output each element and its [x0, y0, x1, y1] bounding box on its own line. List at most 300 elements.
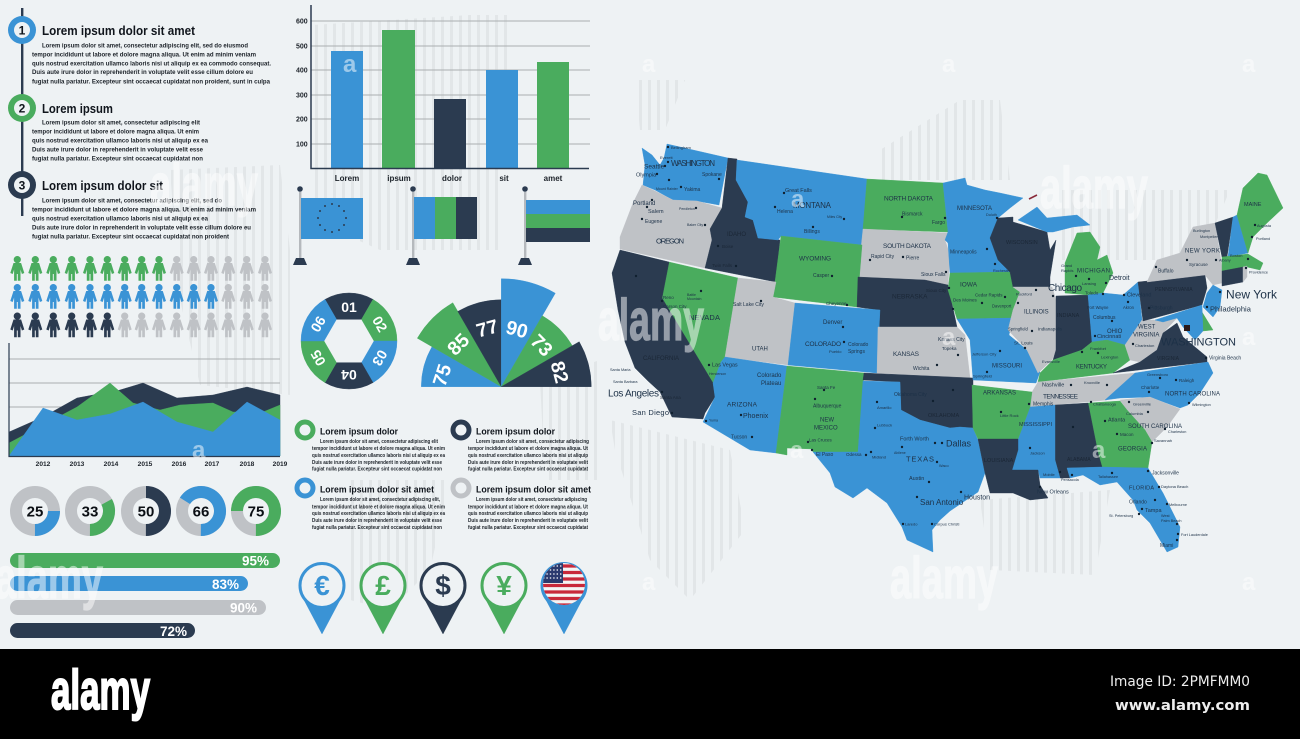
- map labels: Corpus Christi: [934, 522, 959, 526]
- map labels: Columbia: [1126, 411, 1144, 416]
- step 3 badge: 3: [19, 178, 26, 192]
- timeline: [8, 8, 36, 216]
- state: Iowa: [948, 272, 1020, 319]
- map labels: OREGON: [656, 236, 684, 246]
- map labels: Charleston: [1168, 430, 1186, 434]
- legend item blue: Lorem ipsum dolor sit amet: [320, 484, 434, 494]
- text block 3: fugiat nulla pariatur. Excepteur sint occaecat cupidatat non proident: [32, 234, 230, 240]
- map labels: Atlanta: [1108, 418, 1126, 424]
- map labels: Greenville: [1133, 402, 1152, 406]
- state: Alabama: [1055, 403, 1102, 478]
- legend item green: fugiat nulla pariatur. Excepteur sint occaecat cupidatat non: [312, 466, 442, 472]
- legend item gray: Lorem ipsum dolor sit amet: [476, 484, 591, 494]
- map labels: MONTANA: [793, 201, 832, 210]
- watermarks: a: [192, 437, 206, 464]
- map labels: Yakima: [684, 187, 701, 193]
- map labels: Lexington: [1101, 354, 1118, 360]
- map labels: Boise: [722, 244, 734, 249]
- map labels: Abilene: [894, 451, 906, 455]
- donut 66: [175, 485, 227, 537]
- text block 2: [32, 102, 208, 162]
- pin: yen: ¥: [496, 570, 512, 601]
- state: Mississippi: [1012, 405, 1060, 478]
- pin: dollar: [421, 564, 465, 634]
- bar chart: 200: [296, 116, 308, 124]
- map labels: Salt Lake City: [733, 302, 764, 308]
- pin: yen: [482, 564, 526, 634]
- bar chart: [296, 5, 590, 183]
- map labels: MINNESOTA: [957, 206, 992, 212]
- area chart: 2016: [172, 461, 187, 468]
- map labels: IOWA: [960, 282, 978, 288]
- map labels: St. Louis: [1014, 340, 1033, 346]
- state: Arkansas: [972, 385, 1032, 439]
- map labels: Miles City: [827, 215, 842, 219]
- state: Virginia: [1113, 323, 1207, 373]
- legend item green: [297, 422, 446, 472]
- map labels: Charleston: [1135, 343, 1154, 348]
- bar chart: 100: [296, 142, 308, 148]
- map labels: Great Falls: [785, 188, 812, 194]
- flag: horizontal tricolour: [518, 186, 590, 265]
- watermarks: alamy: [890, 546, 998, 611]
- map labels: Seattle: [644, 164, 665, 170]
- map labels: KANSAS: [893, 351, 920, 358]
- text block 2: fugiat nulla pariatur. Excepteur sint occaecat cupidatat non: [32, 156, 203, 162]
- map labels: Colorado: [757, 373, 782, 379]
- map labels: Rochester: [993, 269, 1011, 273]
- watermarks: [0, 51, 1256, 611]
- map labels: WASHINGTON: [671, 159, 715, 168]
- map labels: Tampa: [1145, 508, 1162, 514]
- map labels: St. Petersburg: [1109, 514, 1133, 518]
- text block 2: Lorem ipsum: [42, 102, 113, 116]
- map labels: Rockford: [1016, 292, 1032, 296]
- bar chart: ipsum: [387, 174, 411, 183]
- bar 95%: 95%: [242, 554, 269, 568]
- map labels: Duluth: [986, 213, 997, 217]
- state: Kentucky: [1038, 340, 1130, 382]
- map labels: Augusta: [1257, 224, 1272, 228]
- map labels: WEST: [1138, 324, 1156, 330]
- map labels: Syracuse: [1189, 262, 1208, 267]
- bar 90%: 90%: [230, 600, 257, 616]
- text block 1: quis nostrud exercitation ullamco laboris nisi ut aliquip ex ea commodo consequat.: [32, 60, 271, 68]
- map labels: Wichita: [913, 366, 930, 372]
- map labels: Springfield: [1008, 326, 1028, 332]
- map labels: Pendleton: [679, 207, 695, 211]
- area chart: 2018: [240, 461, 255, 468]
- map labels: Fargo: [932, 220, 945, 226]
- donut 33: [64, 485, 116, 537]
- state: Maryland: [1155, 305, 1203, 340]
- map labels: Mount Rainier: [656, 187, 679, 191]
- radial fan chart: 77: [474, 316, 501, 342]
- map labels: Indianapolis: [1038, 326, 1063, 332]
- hexagonal ring chart: 01: [341, 299, 357, 315]
- map labels: ARIZONA: [727, 402, 758, 408]
- map labels: San Antonio: [920, 498, 964, 507]
- map labels: Mountain: [687, 297, 701, 301]
- watermarks: a: [790, 437, 804, 464]
- state: Michigan lower: [1065, 232, 1113, 295]
- area chart: 2014: [104, 461, 119, 468]
- map labels: Lubbock: [877, 422, 892, 428]
- legend item blue: Duis aute irure dolor in reprehenderit in voluptate velit esse: [312, 518, 442, 524]
- legend item navy: tempor incididunt ut labore et dolore magna aliqua. Ut: [468, 446, 588, 452]
- map labels: Cleveland: [1127, 292, 1151, 298]
- map labels: Cincinnati: [1097, 334, 1121, 340]
- map labels: INDIANA: [1057, 313, 1080, 319]
- text block 3: Lorem ipsum dolor sit: [42, 179, 164, 193]
- map labels: COLORADO: [805, 341, 841, 348]
- map labels: MAINE: [1244, 202, 1262, 208]
- map labels: Davenport: [992, 304, 1012, 308]
- map labels: TEXAS: [906, 454, 934, 464]
- map labels: Tucson: [731, 434, 747, 440]
- state: Minnesota: [943, 178, 1023, 273]
- map labels: ILLINOIS: [1024, 310, 1049, 316]
- map labels: New Orleans: [1037, 490, 1069, 496]
- map labels: Miami: [1160, 543, 1173, 549]
- radial fan chart: 90: [503, 317, 530, 343]
- map labels: KENTUCKY: [1076, 364, 1107, 370]
- map labels: Amarillo: [877, 405, 892, 410]
- map labels: Phoenix: [743, 413, 769, 420]
- map labels: FLORIDA: [1129, 486, 1154, 492]
- donut 25: [16, 492, 54, 530]
- legend item blue: fugiat nulla pariatur. Excepteur sint occaecat cupidatat non: [312, 525, 442, 531]
- state: North Dakota: [863, 179, 948, 232]
- map labels: Toledo: [1085, 290, 1099, 296]
- bar chart: 400: [296, 68, 308, 74]
- map labels: Los Angeles: [608, 388, 659, 400]
- legend item navy: [453, 422, 589, 472]
- state: Oklahoma: [863, 373, 973, 428]
- map labels: Philadelphia: [1210, 304, 1252, 314]
- text block 2: quis nostrud exercitation ullamco laboris nisi ut aliquip ex ea: [32, 138, 208, 144]
- map labels: Bellingham: [671, 145, 691, 150]
- text block 2: Duis aute irure dolor in reprehenderit in voluptate velit esse: [32, 146, 203, 154]
- bar chart: Lorem: [335, 174, 359, 183]
- bar 83%: [10, 576, 248, 592]
- map labels: Albany: [1219, 258, 1231, 262]
- radial fan chart: [417, 279, 591, 389]
- state: Nebraska: [857, 277, 957, 327]
- legend item gray: tempor incididunt ut labore et dolore magna aliqua. Ut: [468, 504, 588, 510]
- bar chart: amet: [544, 174, 563, 183]
- map labels: Chicago: [1048, 283, 1082, 294]
- map labels: Henderson: [709, 372, 726, 376]
- text block 3: Lorem ipsum dolor sit amet, consectetur adipiscing elit, sed do: [42, 198, 222, 204]
- donut 50: [127, 492, 165, 530]
- watermarks: a: [642, 51, 656, 78]
- hexagonal ring chart: 04: [341, 367, 357, 383]
- pin: euro: [300, 564, 344, 634]
- state: Nevada: [662, 262, 738, 383]
- state: Delaware: [1202, 312, 1213, 331]
- watermarks: a: [1242, 324, 1256, 351]
- area chart: 2019: [273, 461, 288, 468]
- map labels: UTAH: [752, 346, 768, 352]
- map labels: Chattanooga: [1093, 402, 1117, 406]
- map labels: Las Cruces: [809, 438, 833, 442]
- text block 1: Lorem ipsum dolor sit amet, consectetur adipiscing elit, sed do eiusmod: [42, 42, 248, 50]
- step 1 badge: [8, 16, 36, 44]
- map labels: Olympia: [636, 172, 657, 178]
- map labels: TENNESSEE: [1043, 394, 1079, 400]
- legend item blue: [297, 480, 446, 531]
- map labels: Portland: [1256, 237, 1270, 241]
- legend item blue: tempor incididunt ut labore et dolore magna aliqua. Ut enim: [312, 504, 445, 510]
- donut 75: [237, 492, 275, 530]
- map labels: Pensacola: [1061, 478, 1080, 482]
- text block 3: quis nostrud exercitation ullamco laboris nisi ut aliquip ex ea: [32, 216, 208, 222]
- state: Montana: [736, 160, 867, 245]
- map labels: Yuma: [709, 418, 718, 422]
- map labels: MEXICO: [814, 426, 838, 432]
- state: Michigan upper: [1018, 207, 1090, 232]
- legend item blue: Lorem ipsum dolor sit amet, consectetur adipiscing elit,: [320, 497, 440, 503]
- watermarks: alamy: [150, 153, 258, 218]
- legend item navy: Duis aute irure dolor in reprehenderit in voluptate velit: [468, 460, 588, 466]
- state: Connecticut: [1222, 267, 1243, 286]
- map labels: Rapids: [1061, 268, 1073, 273]
- map labels: Topeka: [942, 346, 957, 351]
- map labels: OKLAHOMA: [928, 413, 960, 419]
- legend item navy: Lorem ipsum dolor: [476, 426, 555, 436]
- map labels: Forth Worth: [900, 436, 929, 442]
- area chart: [9, 343, 288, 468]
- legend item navy: quis nostrud exercitation ullamco laboris nisi ut aliquip: [468, 453, 588, 459]
- map labels: Twin Falls: [712, 263, 733, 268]
- radial fan chart: 75: [429, 361, 457, 389]
- text block 3: Duis aute irure dolor in reprehenderit in voluptate velit esse cillum dolore eu: [32, 224, 251, 232]
- state: Washington: [642, 144, 728, 205]
- state: Arizona: [703, 357, 787, 453]
- text block 3: [32, 179, 256, 240]
- map labels: West: [1161, 514, 1171, 518]
- map labels: Buffalo: [1158, 268, 1174, 274]
- state: Vermont: [1215, 217, 1233, 257]
- image id: Image ID: 2PMFMM0: [1110, 674, 1250, 690]
- map labels: Springfield: [973, 374, 992, 378]
- watermarks: a: [642, 569, 656, 596]
- map labels: Melbourne: [1169, 503, 1187, 507]
- map labels: Pittsburgh: [1150, 306, 1173, 312]
- map labels: Detroit: [1109, 275, 1130, 282]
- state: Georgia: [1088, 401, 1152, 468]
- map labels: Albuquerque: [813, 404, 842, 410]
- map labels: Colorado: [848, 342, 869, 348]
- map labels: Santa Fe: [817, 385, 836, 390]
- map labels: Laredo: [905, 522, 918, 526]
- map labels: Daytona Beach: [1161, 484, 1188, 489]
- map labels: Waco: [939, 464, 949, 468]
- map labels: PENNSYLVANIA: [1155, 287, 1193, 293]
- map labels: Santa Maria: [610, 368, 631, 372]
- state: Ohio: [1088, 282, 1142, 345]
- map labels: Rapid City: [871, 254, 895, 260]
- map labels: SOUTH DAKOTA: [883, 243, 932, 250]
- legend item green: Lorem ipsum dolor: [320, 426, 398, 436]
- map labels: Boston: [1230, 253, 1242, 258]
- radial fan chart: 73: [526, 330, 557, 361]
- pictogram people: [10, 256, 272, 337]
- step 3 badge: [8, 171, 36, 199]
- watermarks: a: [791, 186, 805, 213]
- flag: stars: [293, 186, 363, 265]
- legend item blue: quis nostrud exercitation ullamco laboris nisi ut aliquip ex ea: [312, 511, 446, 517]
- map labels: Evansville: [1042, 359, 1061, 364]
- map labels: Grand: [1061, 263, 1072, 268]
- state: Wisconsin: [990, 217, 1056, 287]
- donut 50: 50: [138, 504, 154, 520]
- watermarks: a: [1092, 437, 1106, 464]
- state: Texas: [813, 381, 985, 552]
- map labels: Virginia Beach: [1209, 356, 1241, 362]
- bar chart: 600: [296, 18, 308, 26]
- map labels: Frankfort: [1090, 346, 1107, 351]
- map labels: Reno: [663, 295, 674, 300]
- map labels: Jackson: [1030, 450, 1045, 456]
- map labels: Knoxville: [1084, 380, 1101, 385]
- state: South Dakota: [858, 229, 950, 285]
- footer bar: [0, 649, 1300, 739]
- map labels: Odessa: [846, 452, 862, 457]
- map labels: Savannah: [1154, 438, 1172, 443]
- map labels: MICHIGAN: [1077, 268, 1110, 274]
- map labels: Little Rock: [1000, 413, 1019, 418]
- bar chart: dolor: [442, 174, 462, 183]
- map labels: Portland: [633, 201, 655, 207]
- map labels: ALABAMA: [1067, 457, 1091, 463]
- legend item gray: quis nostrud exercitation ullamco laboris nisi ut aliquip: [468, 511, 588, 517]
- map labels: Palm Beach: [1161, 519, 1181, 523]
- map labels: Denver: [823, 320, 842, 326]
- map labels: Las Vegas: [712, 362, 738, 368]
- map labels: WYOMING: [799, 256, 831, 262]
- radial fan chart: 82: [546, 359, 573, 386]
- map labels: Pierre: [906, 256, 920, 262]
- map labels: Pueblo: [829, 349, 842, 354]
- watermarks: a: [1242, 51, 1256, 78]
- map labels: Sioux City: [926, 288, 947, 293]
- bar chart: sit: [499, 174, 509, 183]
- map labels: Wilmington: [1192, 403, 1211, 407]
- map labels: Everett: [660, 155, 674, 160]
- map labels: Springs: [848, 349, 865, 355]
- watermarks: a: [1242, 569, 1256, 596]
- map capital marker: [1184, 325, 1190, 331]
- map labels: Montpelier: [1200, 235, 1218, 239]
- map labels: Tallahassee: [1098, 475, 1118, 479]
- step 2 badge: 2: [19, 102, 26, 116]
- map labels: Raleigh: [1179, 378, 1195, 383]
- text block 1: Duis aute irure dolor in reprehenderit in voluptate velit esse cillum dolore eu: [32, 69, 253, 76]
- pin: pound: [361, 564, 405, 634]
- state: Louisiana: [978, 439, 1048, 500]
- state: California: [612, 250, 715, 419]
- state: New Mexico: [776, 366, 864, 455]
- map labels: Helena: [777, 209, 793, 215]
- donut 66: 66: [193, 504, 209, 520]
- legend item gray: Duis aute irure dolor in reprehenderit in voluptate velit: [468, 518, 588, 524]
- watermarks: a: [343, 51, 357, 78]
- pin: US flag: [540, 560, 590, 634]
- pin: dollar: $: [435, 570, 451, 601]
- map labels: NORTH DAKOTA: [884, 196, 934, 202]
- text block 1: fugiat nulla pariatur. Excepteur sint occaecat cupidatat non proident, sunt in culpa: [32, 78, 270, 86]
- watermarks: alamy: [598, 288, 704, 353]
- state: Idaho: [705, 158, 780, 282]
- bar chart: 300: [296, 92, 308, 100]
- area chart: 2015: [138, 461, 153, 468]
- map labels: El Paso: [816, 452, 833, 458]
- map labels: Santa Barbara: [613, 380, 638, 384]
- map labels: WISCONSIN: [1006, 240, 1038, 246]
- state: Colorado: [788, 303, 880, 373]
- map labels: NEW YORK: [1185, 248, 1220, 254]
- legend item navy: fugiat nulla pariatur. Excepteur sint occaecat cupidatat: [468, 466, 588, 472]
- donut charts: [16, 485, 275, 537]
- map labels: Plateau: [761, 381, 781, 387]
- bar 90%: [10, 600, 266, 616]
- map labels: Kansas City: [938, 337, 965, 343]
- state: Indiana: [1053, 295, 1092, 360]
- state: Rhode Island: [1243, 266, 1247, 282]
- bar 95%: [10, 553, 280, 568]
- donut 33: 33: [82, 504, 98, 520]
- legend item gray: Lorem ipsum dolor sit amet, consectetur adipiscing: [476, 497, 587, 503]
- map labels: Austin: [909, 476, 924, 482]
- map labels: NEBRASKA: [892, 294, 928, 300]
- step 1 badge: 1: [19, 24, 26, 38]
- map labels: Battle: [687, 293, 696, 297]
- state: Missouri: [957, 318, 1040, 383]
- map labels: Salem: [648, 209, 664, 215]
- text block 1: Lorem ipsum dolor sit amet: [42, 24, 196, 38]
- map labels: Houston: [964, 494, 990, 502]
- flag: vertical tricolour: [406, 186, 477, 265]
- pin: pound: £: [375, 570, 391, 601]
- watermarks: a: [942, 51, 956, 78]
- map labels: Lansing: [1082, 281, 1096, 286]
- map labels: IDAHO: [727, 232, 746, 238]
- hexagonal ring chart: [301, 293, 397, 389]
- state: Maine: [1237, 173, 1283, 253]
- map labels: Fort Wayne: [1087, 305, 1109, 310]
- area chart: 2012: [36, 461, 51, 468]
- map labels: Casper: [813, 273, 829, 279]
- legend item navy: Lorem ipsum dolor sit amet, consectetur adipiscing: [476, 439, 589, 445]
- map labels: Spokane: [702, 172, 722, 178]
- map labels: [608, 145, 1278, 549]
- map labels: Fort Lauderdale: [1181, 533, 1208, 537]
- state: Wyoming: [773, 236, 862, 307]
- map labels: Jacksonville: [1152, 470, 1179, 476]
- progress bars: [10, 553, 280, 639]
- USA map: [612, 144, 1283, 552]
- map labels: Providence: [1249, 270, 1268, 274]
- map labels: New York: [1226, 288, 1278, 302]
- step 2 badge: [8, 94, 36, 122]
- state: Florida: [1067, 467, 1180, 552]
- map labels: Santa Ana: [660, 395, 681, 400]
- map labels: SOUTH CAROLINA: [1128, 424, 1182, 430]
- legend item green: Lorem ipsum dolor sit amet, consectetur adipiscing elit: [320, 439, 438, 445]
- map labels: Eugene: [645, 219, 662, 225]
